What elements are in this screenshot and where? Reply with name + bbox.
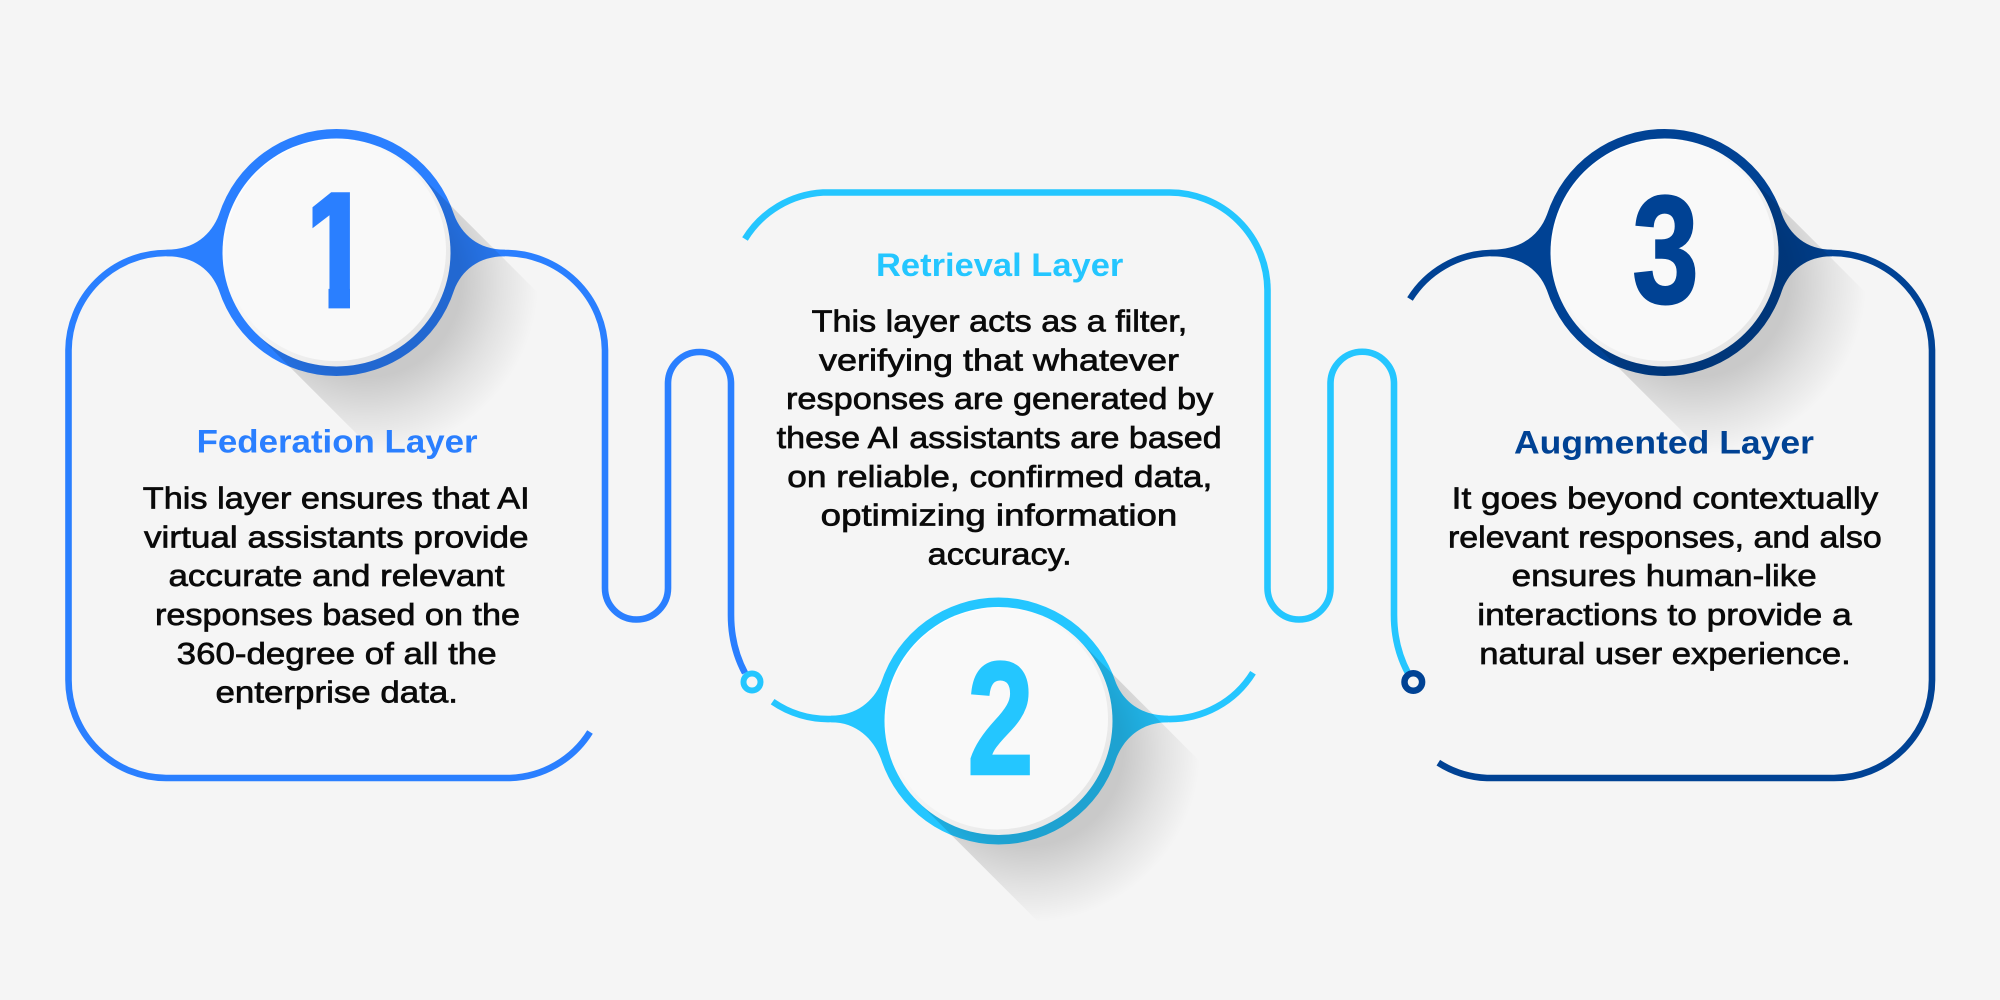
description: augmented layer: relevant responses, and also bbox=[1448, 519, 1882, 554]
number badge 2: 2 bbox=[967, 630, 1034, 809]
number badge 2 bbox=[831, 598, 1298, 1000]
description: augmented layer: It goes beyond contextually bbox=[1452, 480, 1879, 515]
number badge 3 bbox=[1490, 129, 1964, 552]
description: augmented layer: interactions to provide a bbox=[1477, 597, 1853, 632]
description: federation layer: This layer ensures that AI bbox=[143, 480, 530, 515]
heading: augmented layer: Augmented Layer bbox=[1514, 424, 1814, 460]
description: augmented layer: ensures human-like bbox=[1512, 558, 1817, 593]
description: augmented layer: natural user experience. bbox=[1479, 636, 1851, 671]
description: retrieval layer: responses are generated by bbox=[786, 381, 1214, 416]
connector dot: cyan line end bbox=[1404, 673, 1422, 691]
panel: augmented layer bbox=[1404, 129, 1964, 778]
outline connector: augmented bbox=[1410, 253, 1932, 778]
description: retrieval layer: on reliable, confirmed data, bbox=[787, 459, 1212, 494]
panel: retrieval layer bbox=[744, 192, 1408, 1000]
number badge 3: 3 bbox=[1632, 165, 1699, 336]
description: federation layer: responses based on the bbox=[155, 597, 520, 632]
description: augmented layer bbox=[1448, 480, 1882, 671]
description: federation layer bbox=[143, 480, 530, 710]
description: retrieval layer: This layer acts as a filter, bbox=[812, 304, 1187, 339]
number badge 1 bbox=[166, 129, 522, 438]
description: federation layer: virtual assistants provide bbox=[144, 519, 529, 554]
outline connector: federation bbox=[68, 253, 745, 778]
description: federation layer: accurate and relevant bbox=[168, 558, 505, 593]
description: retrieval layer: optimizing information bbox=[821, 498, 1177, 533]
description: retrieval layer: verifying that whatever bbox=[819, 342, 1179, 377]
description: retrieval layer bbox=[777, 304, 1222, 571]
heading: retrieval layer: Retrieval Layer bbox=[876, 247, 1123, 283]
outline connector: retrieval top bbox=[745, 192, 1408, 673]
description: federation layer: 360-degree of all the bbox=[177, 636, 497, 671]
description: retrieval layer: these AI assistants are based bbox=[777, 420, 1222, 455]
panel: federation layer bbox=[68, 129, 745, 778]
description: retrieval layer: accuracy. bbox=[928, 536, 1072, 571]
connector dot: blue line end bbox=[744, 674, 760, 690]
outline connector: retrieval bottom bbox=[773, 673, 1253, 719]
description: federation layer: enterprise data. bbox=[216, 675, 458, 710]
number badge 1: 1 bbox=[299, 158, 374, 342]
heading: federation layer: Federation Layer bbox=[197, 424, 478, 460]
